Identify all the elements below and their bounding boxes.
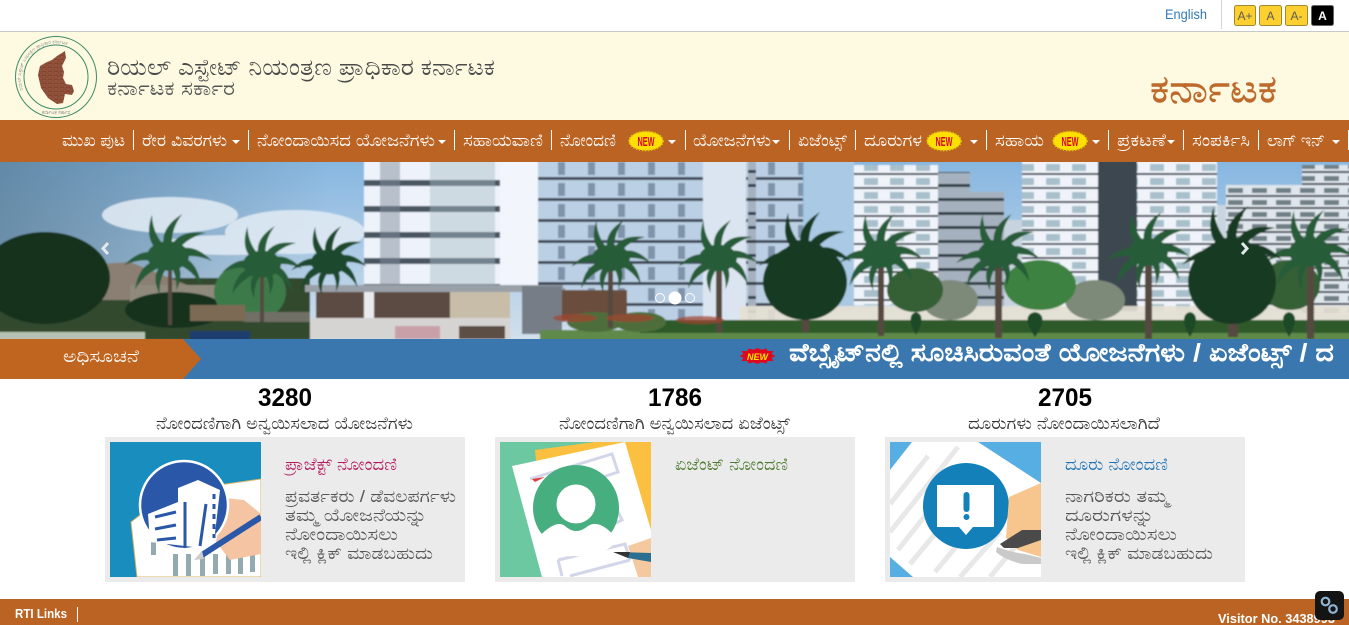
panel: agent registration [495,437,855,582]
font size buttons [1234,6,1334,26]
ticker message: ವೆಬ್ಸೈಟ್‌ನಲ್ಲಿ ಸೂಚಿಸಿರುವಂತೆ ಯೋಜನೆಗಳು / ಏಜೆಂಟ್ಸ್ / ದ [789,339,1334,369]
project heading: ಪ್ರಾಜೆಕ್ಟ್ ನೋಂದಣಿ [284,455,397,476]
font size buttons: A [1318,9,1327,23]
carousel previous arrow [103,243,108,254]
state wordmark: ಕರ್ನಾಟಕ [1150,69,1277,111]
ticker new badge: NEW [747,352,770,362]
icon: building plan and pen [110,442,261,577]
nav items: ಯೋಜನೆಗಳು [693,131,771,150]
complaint description [1065,487,1213,564]
font size buttons: A [1266,9,1275,23]
nav items: ಪ್ರಕಟಣೆ [1117,131,1166,151]
nav items: ನೋಂದಾಯಿಸದ ಯೋಜನೆಗಳು [257,131,435,150]
panel: complaint registration [885,437,1245,582]
icon: agent profile form [500,442,651,577]
stat: projects: 3280 [258,384,312,412]
stat: agents [559,384,791,435]
logo seal [15,36,97,118]
stat: complaints [968,384,1160,433]
navigation bar [0,120,1349,162]
header band [0,32,1349,120]
project description: ತಮ್ಮ ಯೋಜನೆಯನ್ನು [285,506,427,527]
nav items: ಸಹಾಯವಾಣಿ [463,131,543,150]
panel: project registration [105,437,465,582]
hero banner: residential towers [0,160,1349,341]
nav items: ಸಂಪರ್ಕಿಸಿ [1192,131,1250,150]
project description: ನೋಂದಾಯಿಸಲು [285,525,398,544]
logo seal: ರಿಯಲ್ ಎಸ್ಟೇಟ್ ನಿಯಂತ್ರಣ ಪ್ರಾಧಿಕಾರ ಕರ್ನಾಟಕ [18,40,68,91]
carousel dots [656,292,694,304]
new badges: NEW [936,134,953,149]
project description: ಇಲ್ಲಿ ಕ್ಲಿಕ್ ಮಾಡಬಹುದು [285,544,433,564]
nav items: ಲಾಗ್ ಇನ್ [1267,131,1325,150]
new badges: NEW [1062,134,1079,149]
ticker new badge [740,348,776,364]
floating link widget [1315,591,1344,620]
project description: ಪ್ರವರ್ತಕರು / ಡೆವಲಪರ್ಗಳು [285,487,456,507]
nav items: ಮುಖ ಪುಟ [62,131,125,150]
stat: agents: ನೋಂದಣಿಗಾಗಿ ಅನ್ವಯಿಸಲಾದ ಏಜೆಂಟ್ಸ್ [559,414,791,435]
ticker label [0,339,201,379]
stat: complaints: ದೂರುಗಳು ನೋಂದಾಯಿಸಲಾಗಿದೆ [968,414,1160,433]
ticker label: ಅಧಿಸೂಚನೆ [63,347,139,366]
stat: projects: ನೋಂದಣಿಗಾಗಿ ಅನ್ವಯಿಸಲಾದ ಯೋಜನೆಗಳು [156,414,413,435]
nav items: ದೂರುಗಳ [864,131,922,150]
new badges [629,132,1087,150]
notification ticker [0,339,1349,379]
top utility bar [0,0,1349,32]
footer bar [0,599,1349,625]
stat: projects [156,384,413,435]
nav items: ನೋಂದಣಿ [560,131,616,150]
icon: complaint alert [890,442,1041,577]
logo seal: ಕರ್ನಾಟಕ ಸರ್ಕಾರ [42,110,70,116]
complaint description: ದೂರುಗಳನ್ನು [1065,506,1154,527]
new badges: NEW [638,134,655,149]
font size buttons: A- [1290,9,1303,23]
carousel next arrow [1242,243,1247,254]
stat: complaints: 2705 [1038,384,1092,412]
nav items: ಸಹಾಯ [995,131,1044,150]
nav items: ಏಜೆಂಟ್ಸ್ [798,131,847,151]
stat: agents: 1786 [648,384,702,412]
government subtitle: ಕರ್ನಾಟಕ ಸರ್ಕಾರ [107,78,235,100]
RTI links: RTI Links [15,607,67,621]
complaint heading: ದೂರು ನೋಂದಣಿ [1065,455,1168,474]
nav items: ರೇರ ವಿವರಗಳು [142,131,227,150]
organisation title: ರಿಯಲ್ ಎಸ್ಟೇಟ್ ನಿಯಂತ್ರಣ ಪ್ರಾಧಿಕಾರ ಕರ್ನಾಟಕ [107,54,495,83]
complaint description: ಇಲ್ಲಿ ಕ್ಲಿಕ್ ಮಾಡಬಹುದು [1065,544,1213,564]
font size buttons: A+ [1237,9,1253,23]
agent heading: ಏಜೆಂಟ್ ನೋಂದಣಿ [675,455,788,474]
language link: English [1165,6,1207,22]
complaint description: ನೋಂದಾಯಿಸಲು [1065,525,1177,544]
nav items [62,131,1325,151]
project description [285,487,456,564]
complaint description: ನಾಗರಿಕರು ತಮ್ಮ [1065,487,1172,508]
